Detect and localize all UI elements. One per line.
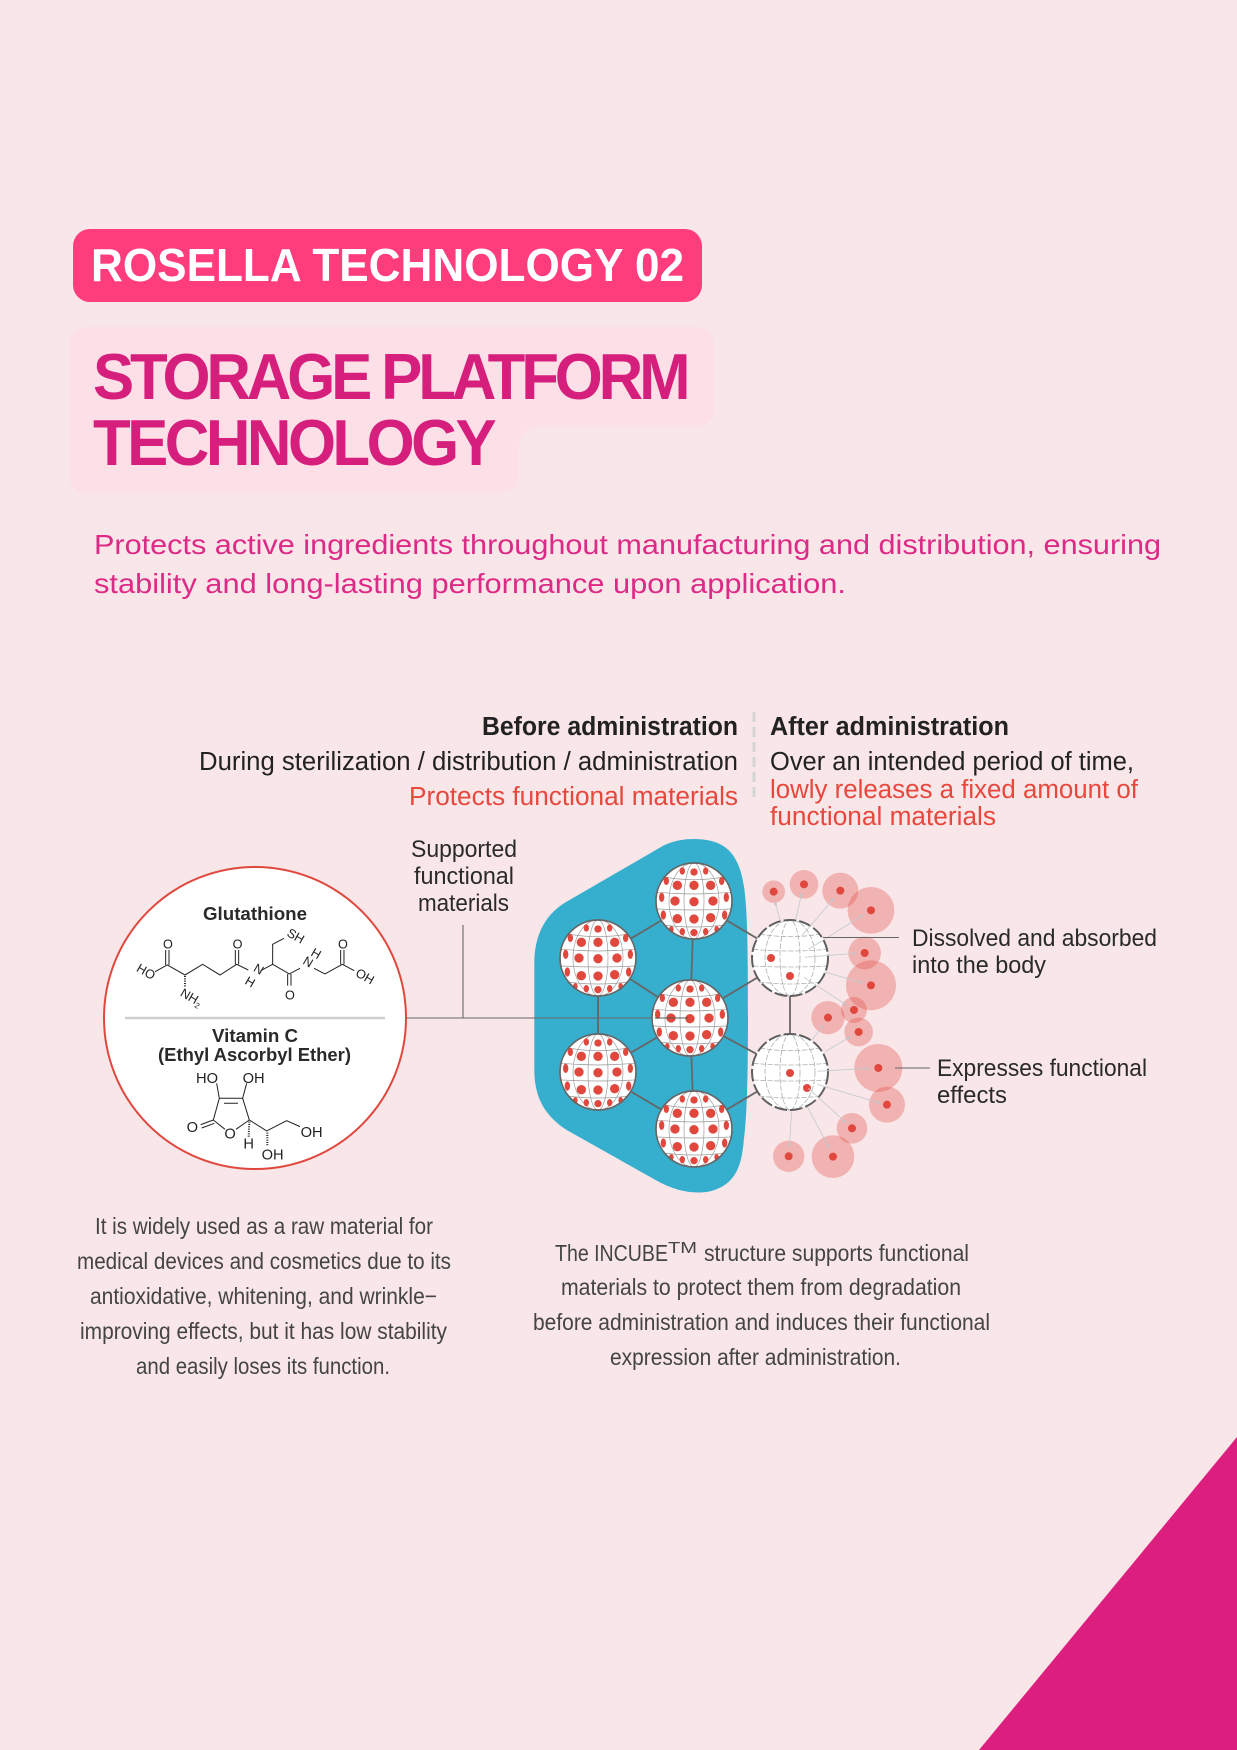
icon: glutathione structure: O (233, 938, 243, 952)
icon: glutathione structure: N (251, 961, 266, 978)
callout: dissolved and absorbed (823, 925, 1157, 979)
icon: vitamin c structure (187, 1071, 323, 1164)
release arrows (775, 893, 881, 1148)
subtitle: Protects active ingredients throughout manufacturing and distribution, ensuring (94, 529, 1161, 560)
connections between spheres (598, 901, 790, 1129)
callout: expresses functional effects: Expresses functional (937, 1055, 1147, 1082)
after administration text block (770, 713, 1139, 831)
badge: section label: ROSELLA TECHNOLOGY 02 (91, 239, 684, 291)
text block: incube description: structure supports functional (704, 1240, 969, 1266)
text block: molecule description: It is widely used as a raw material for (95, 1213, 433, 1239)
icon: vitamin c structure: OH (262, 1148, 284, 1164)
heading: glutathione: Glutathione (203, 904, 307, 924)
label: supported functional materials: materials (418, 890, 509, 917)
callout: dissolved and absorbed: into the body (912, 952, 1046, 979)
icon: glutathione structure: O (338, 937, 348, 951)
after administration text block: After administration (770, 713, 1009, 741)
storage spheres (560, 863, 732, 1167)
text block: incube description: materials to protect them from degradation (561, 1274, 961, 1300)
text block: incube description: TM (668, 1240, 697, 1257)
corner triangle (979, 1437, 1237, 1750)
icon: glutathione structure: OH (353, 966, 377, 987)
text block: incube description: before administration and induces their functional (533, 1309, 990, 1335)
panel: blue carrier shape (534, 839, 748, 1192)
subtitle: stability and long-lasting performance upon application. (94, 568, 846, 599)
icon: glutathione structure (134, 926, 377, 1011)
text block: incube description: The INCUBE (555, 1240, 668, 1266)
heading: vitamin c: Vitamin C (212, 1026, 298, 1046)
title (69, 327, 714, 493)
before administration text block: Protects functional materials (409, 783, 738, 811)
after administration text block: functional materials (770, 803, 996, 831)
callout: expresses functional effects: effects (937, 1082, 1007, 1109)
icon: glutathione structure: HO (134, 961, 158, 983)
icon: glutathione structure: O (285, 988, 295, 1002)
badge: section label (73, 229, 702, 302)
icon: glutathione structure: NH (178, 986, 201, 1007)
label: supported functional materials: functional (414, 863, 514, 890)
icon: glutathione structure: H (242, 974, 257, 990)
icon: vitamin c structure: H (243, 1137, 254, 1153)
divider between before and after (752, 712, 756, 800)
text block: molecule description: and easily loses its function. (136, 1353, 390, 1379)
callout: dissolved and absorbed: Dissolved and absorbed (912, 925, 1157, 952)
text block: molecule description: improving effects, but it has low stability (80, 1318, 447, 1344)
text block: molecule description: medical devices and cosmetics due to its (77, 1248, 451, 1274)
panel: molecules circle (104, 867, 406, 1169)
subtitle (94, 529, 1161, 599)
before administration text block (199, 713, 738, 811)
heading: vitamin c: (Ethyl Ascorbyl Ether) (158, 1045, 351, 1065)
icon: glutathione structure: 2 (193, 1001, 202, 1011)
text block: molecule description: antioxidative, whitening, and wrinkle− (90, 1283, 437, 1309)
label: supported functional materials (411, 836, 517, 917)
text block: molecule description (77, 1213, 451, 1379)
icon: vitamin c structure: OH (243, 1071, 265, 1087)
icon: glutathione structure: SH (284, 926, 307, 947)
title: STORAGE PLATFORM (93, 342, 691, 413)
icon: glutathione structure: H (308, 945, 323, 962)
title: TECHNOLOGY (93, 408, 497, 479)
text block: incube description: expression after administration. (610, 1344, 901, 1370)
icon: vitamin c structure: O (224, 1127, 236, 1143)
after administration text block: Over an intended period of time, (770, 748, 1134, 776)
icon: vitamin c structure: HO (196, 1071, 218, 1087)
releasing spheres (752, 920, 828, 1110)
icon: vitamin c structure: OH (301, 1125, 323, 1141)
text block: incube description (533, 1240, 990, 1370)
before administration text block: Before administration (482, 713, 738, 741)
label: supported functional materials: Supported (411, 836, 517, 863)
released bubbles (762, 870, 905, 1178)
callout: expresses functional effects (895, 1055, 1147, 1109)
heading: vitamin c (158, 1026, 351, 1065)
center sphere callout endpoint (655, 1017, 688, 1019)
callout line: supported materials (406, 925, 688, 1018)
icon: vitamin c structure: O (187, 1120, 198, 1136)
before administration text block: During sterilization / distribution / administration (199, 748, 738, 776)
after administration text block: lowly releases a fixed amount of (770, 776, 1139, 804)
icon: glutathione structure: N (300, 954, 315, 970)
icon: glutathione structure: O (163, 938, 173, 952)
